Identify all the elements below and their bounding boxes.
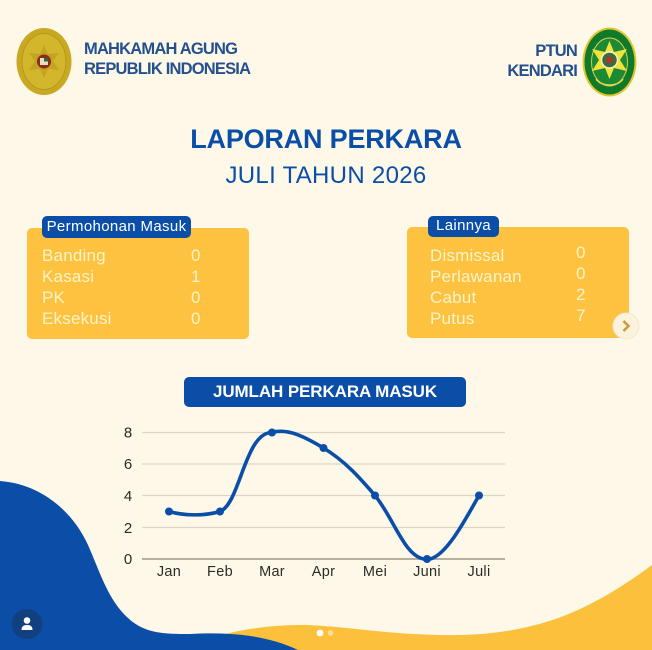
x axis labels bbox=[157, 564, 490, 580]
row labels: Dismissal bbox=[430, 246, 505, 265]
x axis labels: Juli bbox=[468, 564, 490, 580]
row labels: PK bbox=[42, 288, 65, 307]
carousel dots bbox=[316, 630, 334, 636]
row values: 0 bbox=[191, 309, 201, 328]
row values: 0 bbox=[191, 246, 201, 265]
icon: profile avatar bbox=[12, 609, 42, 639]
x axis labels: Jan bbox=[157, 564, 181, 580]
logo: PTUN green emblem bbox=[582, 28, 636, 96]
panel background bbox=[27, 228, 249, 339]
chart heading: JUMLAH PERKARA MASUK bbox=[213, 382, 437, 401]
row labels: Eksekusi bbox=[42, 309, 112, 328]
y axis labels: 6 bbox=[124, 456, 132, 473]
y axis labels: 0 bbox=[124, 551, 132, 568]
row values: 1 bbox=[191, 267, 201, 286]
heading: Mahkamah Agung bbox=[84, 40, 251, 78]
row labels: Banding bbox=[42, 246, 106, 265]
heading: PTUN Kendari: PTUN bbox=[535, 42, 577, 60]
row values: 7 bbox=[576, 306, 586, 325]
chart heading bbox=[184, 377, 466, 407]
x axis labels: Juni bbox=[413, 564, 441, 580]
y axis labels bbox=[124, 424, 132, 568]
blue wave bbox=[0, 481, 298, 650]
data line bbox=[169, 431, 479, 560]
row labels: Putus bbox=[430, 309, 474, 328]
panel tag: Permohonan Masuk bbox=[47, 218, 186, 235]
yellow wave bbox=[225, 565, 652, 650]
row labels bbox=[42, 246, 112, 328]
row values: 2 bbox=[576, 285, 586, 304]
heading: PTUN Kendari: KENDARI bbox=[507, 62, 577, 80]
panel background bbox=[407, 227, 629, 338]
row values: 0 bbox=[576, 243, 586, 262]
heading: Mahkamah Agung: MAHKAMAH AGUNG bbox=[84, 40, 237, 58]
y axis labels: 4 bbox=[124, 488, 132, 505]
logo: Mahkamah Agung gold emblem bbox=[16, 28, 72, 95]
row values bbox=[576, 243, 586, 325]
panel: lainnya bbox=[407, 216, 629, 338]
x axis labels: Apr bbox=[312, 564, 335, 580]
row values bbox=[191, 246, 201, 328]
row labels: Cabut bbox=[430, 288, 476, 307]
icon: next arrow button bbox=[612, 312, 640, 340]
x axis labels: Mar bbox=[259, 564, 285, 580]
data points bbox=[165, 428, 483, 563]
x axis labels: Feb bbox=[207, 564, 233, 580]
x axis labels: Mei bbox=[363, 564, 387, 580]
panel tag: Lainnya bbox=[436, 217, 491, 234]
row labels: Kasasi bbox=[42, 267, 94, 286]
row values: 0 bbox=[191, 288, 201, 307]
panel tag bbox=[428, 216, 499, 237]
heading: PTUN Kendari bbox=[507, 42, 577, 80]
row labels: Perlawanan bbox=[430, 267, 522, 286]
y axis labels: 2 bbox=[124, 520, 132, 537]
y axis labels: 8 bbox=[124, 424, 132, 442]
row values: 0 bbox=[576, 264, 586, 283]
heading: Mahkamah Agung: REPUBLIK INDONESIA bbox=[84, 60, 250, 78]
row labels bbox=[430, 246, 522, 328]
panel: permohonan masuk bbox=[27, 216, 249, 339]
title: LAPORAN PERKARA bbox=[190, 124, 462, 154]
subtitle: JULI TAHUN 2026 bbox=[225, 162, 427, 189]
